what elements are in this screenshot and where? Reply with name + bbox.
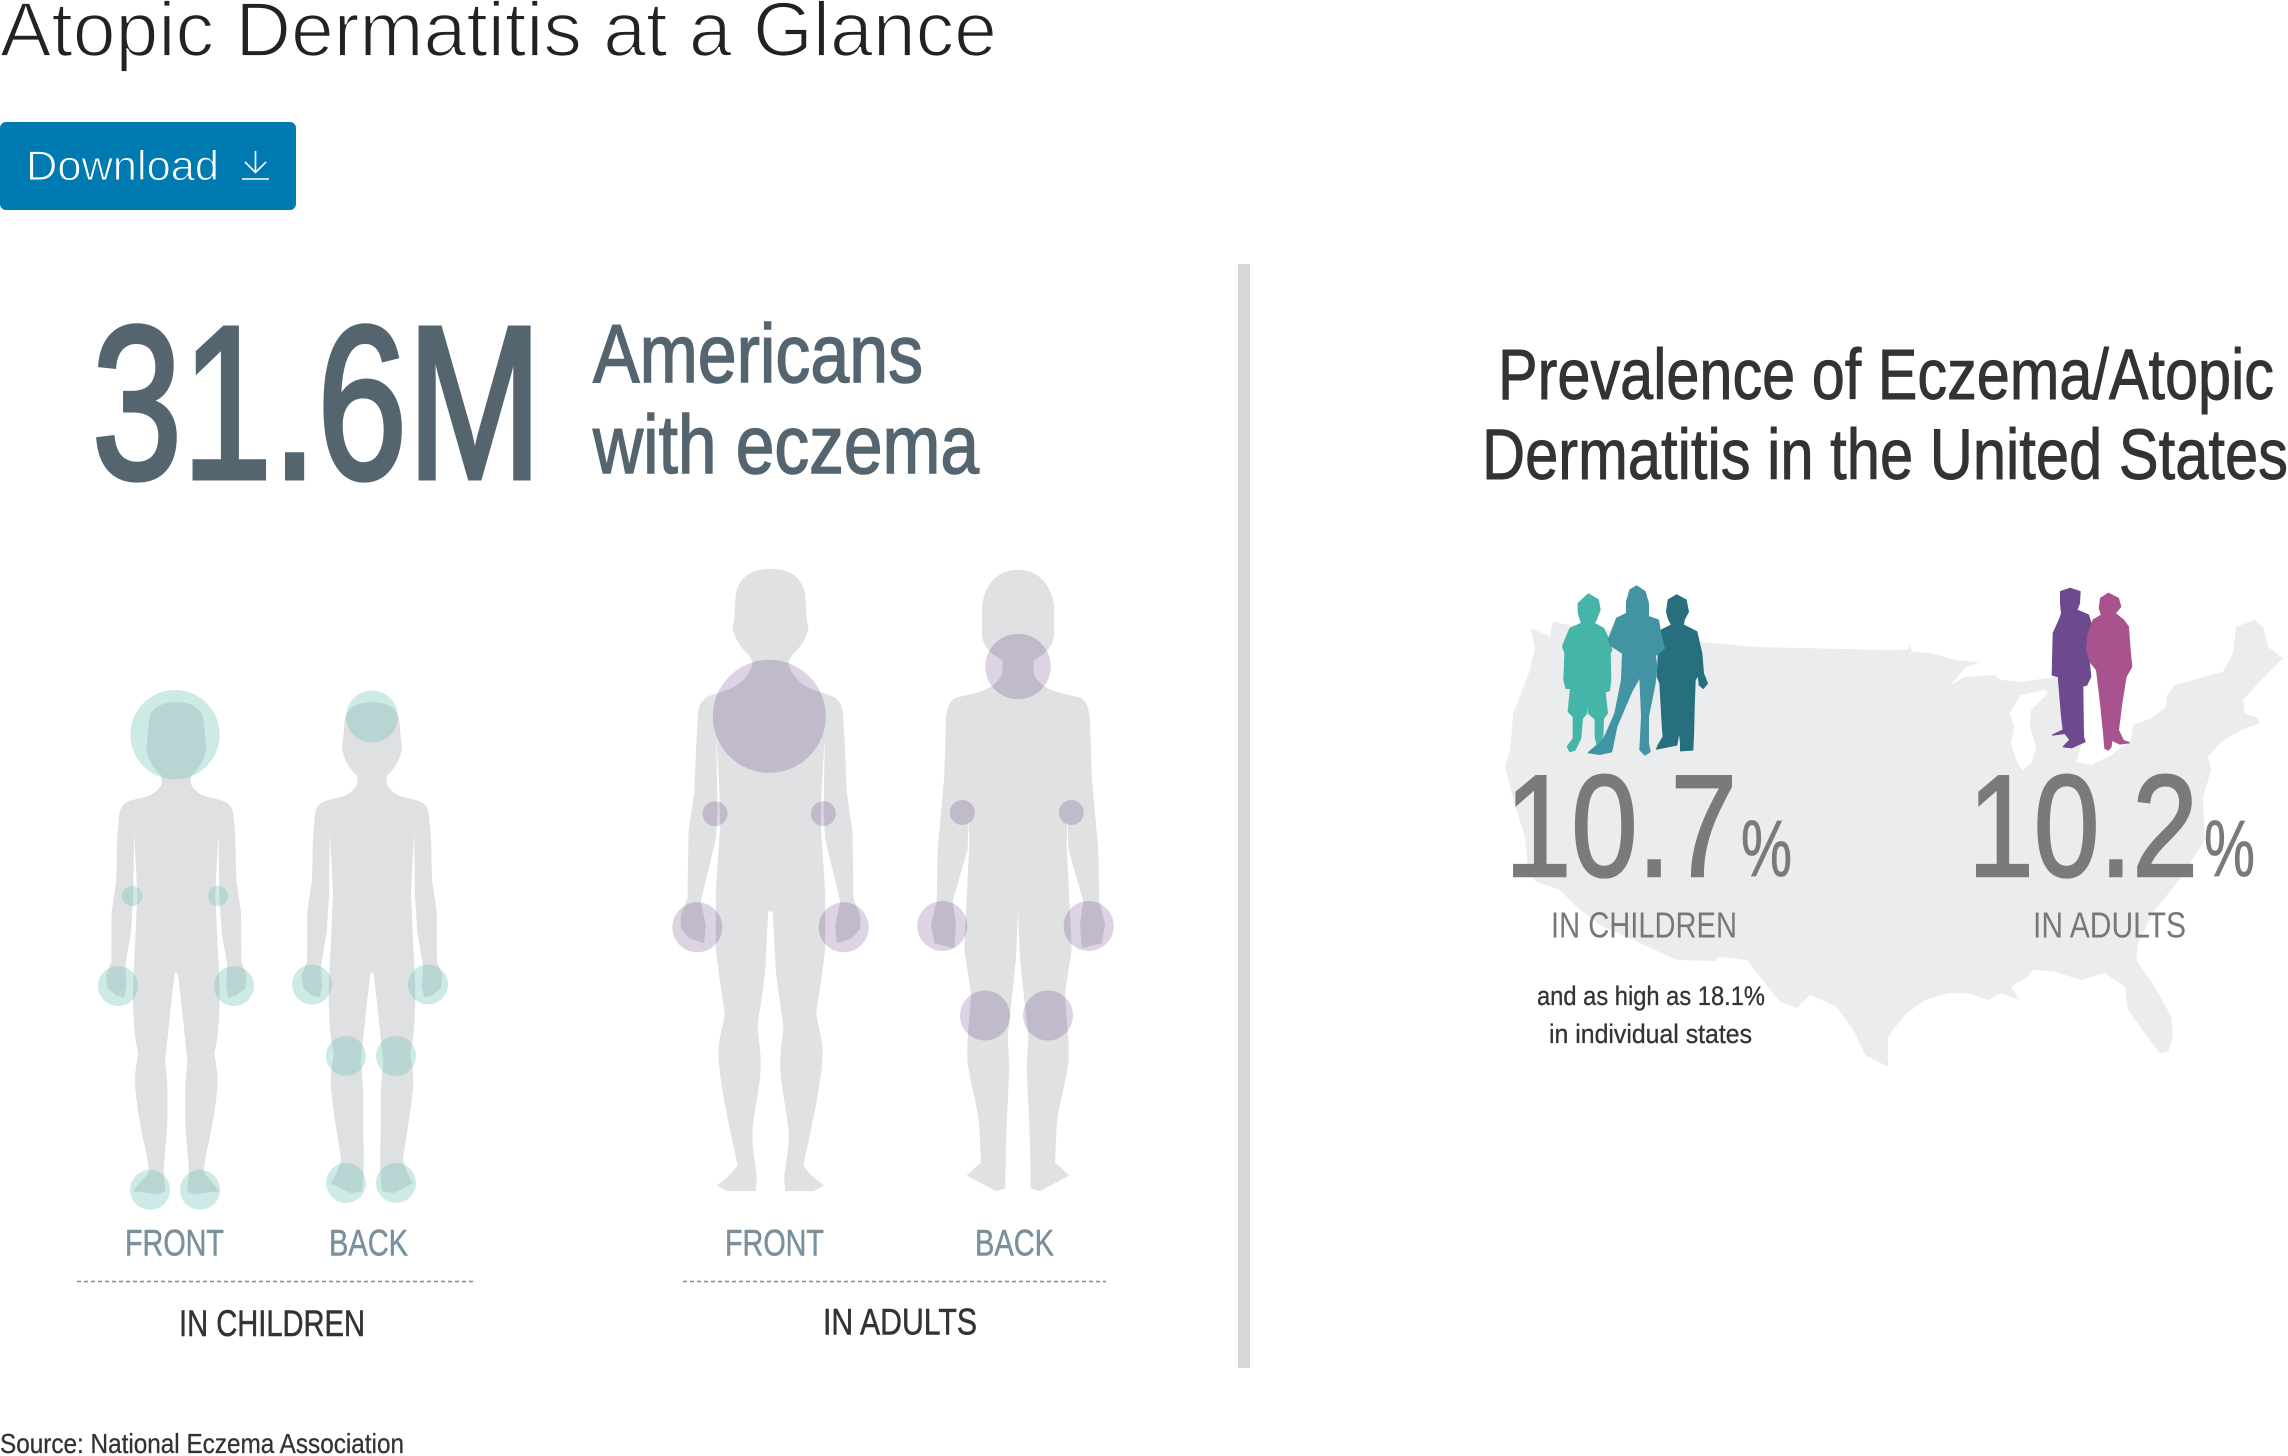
labels: front and back: FRONT — [725, 1222, 824, 1264]
silhouette: boy right — [1657, 595, 1707, 751]
affected areas: adult back — [917, 634, 1114, 1040]
label: in adults: IN ADULTS — [2033, 904, 2186, 946]
vertical divider — [1238, 264, 1250, 1368]
stat caption — [592, 307, 980, 491]
stat: children 10.7%: 10.7 — [1505, 745, 1737, 907]
figure: child front — [98, 690, 254, 1210]
labels: front and back: FRONT — [125, 1222, 224, 1264]
group labels: IN CHILDREN — [179, 1303, 365, 1344]
figure: child back — [292, 690, 448, 1203]
stat caption: Americans — [593, 307, 923, 400]
silhouettes: children — [1563, 586, 1707, 755]
stat: adults 10.2%: % — [2204, 804, 2255, 893]
big stat: 31.6M: 31.6M — [92, 282, 542, 525]
note: individual states: and as high as 18.1% — [1537, 981, 1765, 1011]
note: individual states — [1537, 981, 1765, 1049]
label: in children: IN CHILDREN — [1551, 904, 1737, 946]
heading: prevalence — [1482, 336, 2288, 495]
map: United States — [1505, 620, 2283, 1067]
silhouette: man — [2052, 588, 2091, 748]
affected areas: child front — [98, 690, 254, 1210]
silhouette: girl — [1588, 586, 1664, 755]
group labels: IN ADULTS — [823, 1302, 977, 1342]
download button: Download — [26, 142, 219, 189]
labels: front and back: BACK — [975, 1222, 1054, 1264]
group labels — [179, 1302, 977, 1344]
note: individual states: in individual states — [1549, 1019, 1752, 1049]
figure: adult front — [672, 569, 869, 1191]
labels: front and back: BACK — [329, 1222, 408, 1264]
stat: children 10.7%: % — [1741, 804, 1792, 893]
download button — [0, 122, 296, 210]
silhouette: woman — [2087, 593, 2132, 750]
figure: adult back — [917, 570, 1114, 1191]
silhouettes: adults — [2052, 588, 2132, 750]
silhouette: boy left — [1563, 594, 1612, 752]
stat: adults 10.2%: 10.2 — [1968, 745, 2198, 907]
icon: download arrow — [242, 151, 269, 179]
affected areas: adult front — [672, 660, 869, 952]
affected areas: child back — [292, 690, 448, 1203]
labels: front and back — [125, 1222, 1054, 1264]
stat caption: with eczema — [592, 398, 980, 491]
